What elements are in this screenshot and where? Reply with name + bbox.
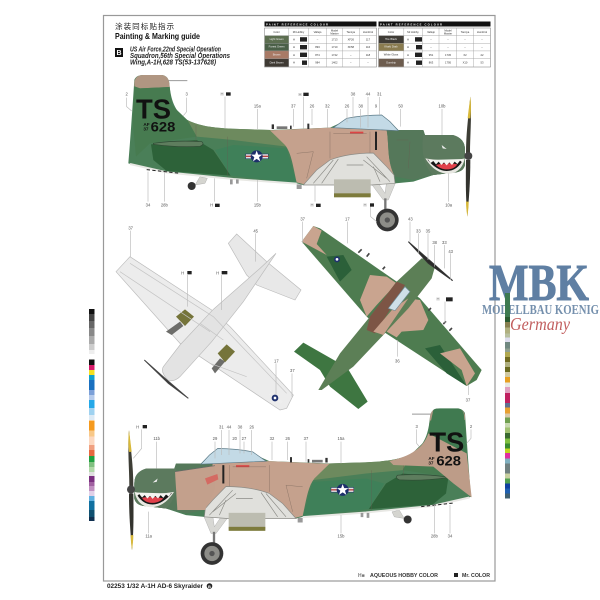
paint table left: Tamiya — [347, 30, 356, 34]
callout labels bottom side view: 32 — [270, 436, 275, 441]
callout labels plan views: 43 — [408, 217, 413, 222]
scheme badge B: B — [116, 50, 122, 57]
tail code bottom: TS — [429, 427, 464, 458]
tailplane — [228, 234, 301, 300]
callout labels top side view: 10a — [445, 202, 453, 207]
pylons — [358, 249, 452, 331]
paint table left: 874 — [315, 53, 320, 57]
tail code bottom: 628 — [436, 452, 461, 468]
callout labels bottom side view: 31 — [219, 424, 224, 429]
callout labels top side view: 31 — [377, 92, 382, 97]
paint table right: 863 — [429, 61, 434, 65]
wing dark patch — [327, 255, 467, 386]
paint table left: 118 — [366, 53, 371, 57]
national insignia — [246, 150, 268, 162]
callout labels bottom side view: 26 — [285, 436, 291, 441]
callout labels top side view: 15a — [254, 103, 261, 108]
callout labels bottom side view — [133, 424, 473, 539]
tail code top: TS — [136, 93, 171, 124]
aircraft: top plan view — [294, 226, 482, 409]
paint table left: – — [350, 62, 352, 65]
callout labels top side view: 38 — [358, 103, 364, 108]
camo: nose green — [387, 130, 465, 180]
callout labels bottom side view: 2 — [470, 424, 473, 429]
callout labels plan views: 37 — [466, 397, 471, 402]
paint table right: 951 — [429, 53, 434, 57]
callout labels bottom side view: 26 — [249, 424, 255, 429]
callout labels plan views: 36 — [395, 358, 400, 363]
fuselage — [318, 258, 435, 390]
aircraft: bottom side view — [127, 409, 471, 565]
footer caption: B — [208, 584, 211, 589]
footer caption: 02253 1/32 A-1H AD-6 Skyraider — [107, 583, 204, 590]
canopy — [388, 287, 410, 311]
paint table left: Dark Brown — [270, 60, 284, 64]
paint table right: – — [447, 38, 449, 42]
wing tan patches — [302, 226, 475, 386]
paint table left: XF26 — [348, 38, 355, 42]
wheel bays — [166, 309, 235, 373]
landing gear and wheel — [372, 182, 399, 231]
panel lines — [120, 263, 287, 393]
callout labels plan views: 33 — [442, 240, 447, 245]
paint table right: – — [447, 46, 449, 49]
callout labels top side view: 2 — [126, 92, 129, 97]
callout labels bottom side view: 38 — [238, 424, 243, 429]
underwing pylons — [230, 179, 302, 189]
callout labels top side view: H — [210, 203, 213, 208]
paint table right — [378, 22, 490, 67]
paint table left: Light Green — [270, 37, 284, 41]
aircraft: top side view — [128, 75, 472, 231]
callout labels plan views: H — [181, 270, 184, 275]
underside strip — [130, 164, 297, 184]
paint table right: – — [464, 38, 466, 42]
paint table right: – — [481, 38, 483, 42]
aircraft: underside plan view — [116, 234, 301, 410]
paint table right: Khaki Drab — [384, 45, 398, 49]
callout labels bottom side view: 44 — [227, 424, 232, 429]
insignia — [334, 256, 340, 262]
tail code top: AF — [143, 122, 150, 127]
camo: dark lower patch — [151, 140, 231, 176]
scheme description: Wing,A-1H,628 TS(53-137628) — [130, 60, 217, 66]
callout labels bottom side view: 3 — [416, 424, 419, 429]
tailplane — [294, 343, 368, 409]
paint table right: X10 — [463, 61, 468, 65]
paint table left: Master — [330, 31, 339, 35]
callout labels top side view: 44 — [366, 92, 371, 97]
paint table left: Vallejo — [314, 30, 322, 34]
paint table right: – — [481, 46, 483, 49]
exhaust cowl fairing — [153, 141, 203, 147]
paint table right: Mr.Hobby — [407, 30, 419, 34]
paint table right: Master — [444, 31, 452, 35]
paint table right: 22 — [480, 53, 484, 57]
page frame — [104, 16, 495, 581]
callout labels top side view: 10b — [439, 103, 446, 108]
paint table left: H — [293, 53, 295, 57]
paint table right: Tamiya — [461, 30, 470, 34]
callout labels top side view: H — [298, 92, 302, 97]
scheme description: US Air Force,22nd Special Operation — [130, 46, 221, 54]
fuselage tan — [373, 298, 408, 335]
propeller — [144, 360, 188, 398]
paint table left: Humbrol — [363, 30, 373, 34]
tail code top: 37 — [143, 127, 149, 132]
paint table left: XF58 — [348, 45, 355, 49]
camo: upper olive band — [187, 120, 287, 147]
panel lines — [196, 125, 410, 178]
callout labels bottom side view: 29 — [213, 436, 218, 441]
paint table right: Color — [388, 30, 394, 34]
callout labels top side view: 28b — [161, 202, 168, 207]
paint table right: 1745 — [445, 53, 451, 57]
tail code bottom: AF — [428, 456, 435, 461]
camo: fin top — [134, 75, 170, 88]
callout labels plan views: H — [216, 270, 219, 275]
paint table left: PAINT REFERENCE COLOUR — [266, 22, 328, 26]
tail wheel — [188, 177, 207, 190]
paint table left: 893 — [315, 45, 320, 49]
paint table left: H — [293, 38, 295, 42]
legend: aqueous hobby color: H■ — [358, 573, 365, 579]
dorsal antennas — [272, 124, 309, 129]
shark eye — [442, 145, 447, 149]
callout labels top side view: H — [220, 92, 224, 97]
tail code bottom: 37 — [428, 461, 434, 466]
paint table left: H — [293, 61, 295, 65]
paint table right: H — [407, 61, 409, 65]
wing root — [303, 153, 395, 185]
paint table left: Model — [331, 28, 339, 32]
callout labels plan views: 38 — [432, 240, 438, 245]
camo: belly green — [215, 145, 297, 183]
callout labels plan views: H — [436, 297, 440, 302]
insignia — [270, 393, 282, 403]
paint table right: 53 — [480, 61, 484, 65]
paint table left: 1713 — [332, 38, 338, 42]
callout labels top side view: 15b — [254, 202, 261, 207]
paint table left: Mr.Hobby — [293, 30, 305, 34]
camo: rear fin olive — [133, 86, 197, 157]
watermark MBK logo — [482, 255, 599, 334]
colour bar left — [89, 309, 94, 521]
callout labels plan views: 43 — [448, 249, 454, 254]
scheme description — [130, 46, 230, 66]
callout labels top side view: 26 — [345, 103, 350, 108]
drop tank pylon — [334, 179, 371, 197]
wing — [116, 257, 293, 410]
paint table right: 1795 — [445, 61, 451, 65]
paint table left: 117 — [366, 38, 371, 42]
callout labels top side view: 37 — [291, 103, 296, 108]
callout labels top side view: 50 — [398, 103, 404, 108]
paint table left: Brown — [273, 52, 281, 56]
callout labels bottom side view: 11a — [145, 534, 153, 539]
fuselage — [128, 75, 465, 185]
cockpit sill red — [350, 132, 363, 134]
shark mouth — [425, 158, 465, 174]
wing details — [313, 157, 390, 183]
paint table left: – — [317, 38, 319, 42]
paint table left: Color — [273, 30, 280, 34]
callout labels bottom side view: 20 — [232, 436, 238, 441]
nose ring — [423, 135, 465, 175]
callout labels top side view: 26 — [310, 103, 315, 108]
paint table right: Humbrol — [477, 30, 487, 34]
callout labels top side view: 3 — [186, 92, 189, 97]
callout labels bottom side view: 15a — [338, 436, 345, 441]
tail code top: 628 — [151, 118, 176, 134]
black stripe — [375, 132, 377, 150]
paint table right: H — [407, 38, 409, 42]
canopy — [333, 115, 398, 131]
paint table right: Model — [444, 28, 452, 32]
paint table right: Vallejo — [427, 30, 435, 34]
colour bar right — [505, 293, 510, 498]
paint table right: H — [407, 45, 409, 49]
callout labels bottom side view: 27 — [242, 436, 247, 441]
camo: tan centre — [270, 128, 395, 185]
paint table right: X2 — [463, 53, 467, 57]
fuselage — [162, 253, 276, 381]
paint table left: – — [367, 62, 369, 65]
fuselage brown stripe — [367, 282, 405, 333]
callout labels plan views: 17 — [274, 358, 279, 363]
paint table left: H — [293, 45, 295, 49]
callout labels bottom side view: 11b — [153, 436, 161, 441]
camo overrides bottom side view — [175, 408, 472, 510]
paint table right: White Gloss — [384, 52, 399, 56]
paint table left: 984 — [315, 61, 320, 65]
callout labels plan views: 45 — [253, 228, 259, 233]
tail code top — [136, 93, 176, 134]
propeller — [408, 242, 453, 281]
callout labels plan views — [128, 217, 471, 402]
callout labels bottom side view: H — [136, 424, 139, 429]
callout labels bottom side view: 15b — [338, 534, 345, 539]
paint table right: – — [464, 46, 466, 49]
paint table right: Tire Black — [385, 37, 398, 41]
callout labels top side view: 34 — [146, 202, 151, 207]
callout labels plan views: 35 — [426, 228, 431, 233]
watermark MBK logo: Germany — [510, 314, 570, 334]
callout labels plan views: 37 — [128, 225, 134, 230]
callout labels bottom side view: 28b — [431, 534, 438, 539]
legend: mr color: Mr. COLOR — [462, 573, 490, 579]
scheme badge B — [115, 48, 123, 57]
paint table left: 1402 — [332, 61, 338, 65]
callout labels bottom side view: 37 — [304, 436, 309, 441]
paint table left: 116 — [366, 45, 371, 49]
paint table right: – — [430, 38, 432, 42]
callout labels plan views: 33 — [416, 228, 421, 233]
callout labels top side view: 9 — [375, 103, 378, 108]
paint table right: H — [407, 53, 409, 57]
callout labels top side view: H — [310, 203, 314, 208]
paint table left: 1742 — [332, 53, 338, 57]
paint table right: – — [430, 46, 432, 49]
scheme description: Squadron,56th Special Operations — [130, 53, 230, 60]
propeller — [464, 97, 472, 217]
callout labels top side view — [126, 92, 453, 222]
paint table left: Forest Green — [269, 45, 285, 49]
callout labels top side view: H — [363, 203, 367, 208]
paint table left: – — [350, 54, 352, 57]
callout labels plan views: 17 — [345, 217, 350, 222]
callout labels plan views: 37 — [300, 217, 306, 222]
title english: Painting & Marking guide — [115, 31, 200, 41]
callout labels top side view: 38 — [351, 92, 356, 97]
callout labels bottom side view: 34 — [448, 534, 453, 539]
title chinese: 涂装同标贴指示 — [115, 21, 175, 31]
paint table right: Gunship — [386, 60, 397, 64]
paint table left: 1710 — [332, 45, 338, 49]
wing — [302, 226, 482, 386]
paint table left — [264, 22, 376, 67]
paint table right: PAINT REFERENCE COLOUR — [380, 22, 442, 26]
legend: aqueous hobby color: AQUEOUS HOBBY COLOR — [370, 573, 438, 579]
callout labels top side view: 32 — [325, 103, 330, 108]
callout labels plan views: 37 — [290, 368, 295, 373]
